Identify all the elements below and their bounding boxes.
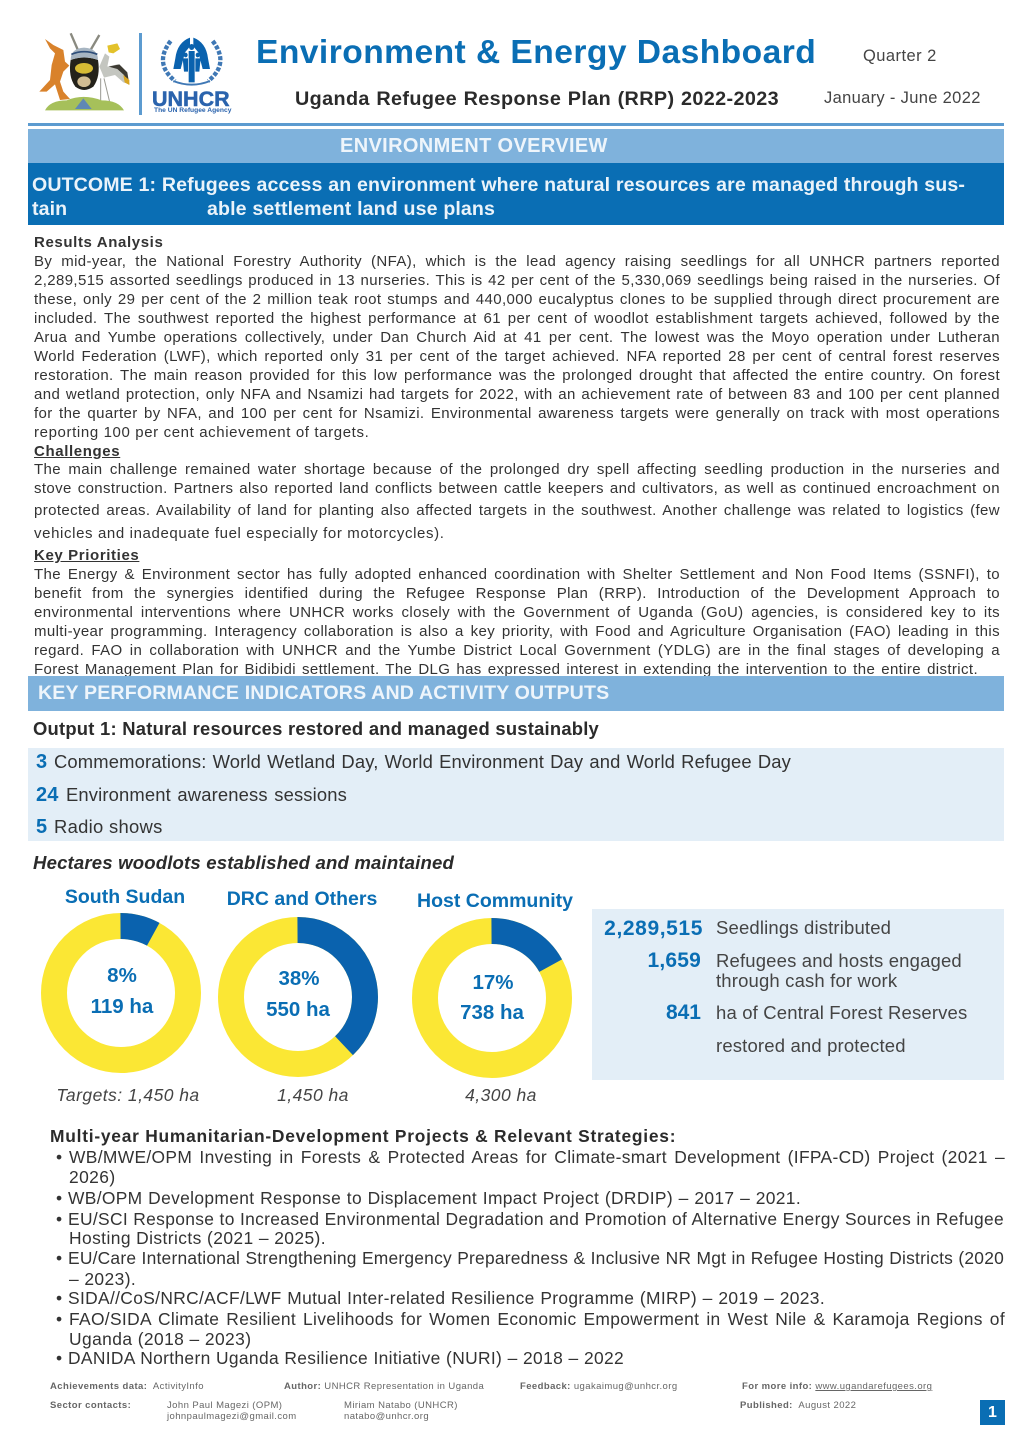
- UNHCR wordmark: UNHCR: [152, 87, 230, 111]
- priorities paragraph: The Energy & Environment sector has fully adopted enhanced coordination with Shelter Settlement and Non Food Items (SSNFI), to: [34, 566, 1000, 583]
- donut hectares: 550 ha: [266, 998, 330, 1021]
- list: multi-year projects: [50, 1126, 1005, 1368]
- page number: [980, 1400, 1005, 1425]
- footer: contact OPM: [166, 1400, 297, 1422]
- results paragraph: included. The southwest reported the highest performance at 61 per cent of woodlot establishment targets achieved, followed by the: [34, 310, 1000, 327]
- donut chart: South Sudan: [41, 886, 201, 1105]
- priorities paragraph: benefit from the synergies identified during the Refugee Response Plan (RRP). Introduction of the Development Approach to: [34, 585, 1000, 602]
- list heading: Multi-year Humanitarian-Development Projects & Relevant Strategies:: [50, 1126, 676, 1146]
- banner: outcome 1: [28, 163, 1004, 225]
- footer: contact OPM: John Paul Magezi (OPM): [167, 1400, 282, 1411]
- logo: UNHCR: [152, 38, 232, 114]
- challenges paragraph: protected areas. Availability of land for planting also affected targets in the southwest. Another challenge was related to logistics (few: [34, 502, 1000, 519]
- outcome text line 2 end: able settlement land use plans: [207, 198, 495, 220]
- footer: contact UNHCR: Miriam Natabo (UNHCR): [344, 1400, 458, 1411]
- list items: SIDA//CoS/NRC/ACF/LWF Mutual Inter-related Resilience Programme (MIRP) – 2019 – 2023.: [68, 1288, 825, 1308]
- list items: •: [56, 1209, 63, 1229]
- donut percent: 8%: [107, 964, 137, 987]
- footer: more info: For more info: www.ugandarefugees.org: [742, 1381, 932, 1392]
- results paragraph: 2,289,515 assorted seedlings produced in 13 nurseries. This is 42 per cent of the 5,330,069 seedlings being raised in the nurseries. Of: [34, 272, 1000, 289]
- count: commemorations: Commemorations: World Wetland Day, World Environment Day and World Refugee Day: [54, 751, 791, 772]
- results paragraph: World Federation (LWF), which reported only 31 per cent of the target achieved. NFA reported 28 per cent of central forest reserves: [34, 348, 1000, 365]
- count: awareness sessions: Environment awareness sessions: [66, 784, 347, 805]
- challenges paragraph: [34, 461, 1000, 542]
- panel: key figures: [592, 909, 1004, 1080]
- text block: key priorities: [34, 547, 1000, 678]
- results paragraph: for the quarter by NFA, and 100 per cent for Nsamizi. Environmental awareness targets were generally on track with most operations: [34, 405, 1000, 422]
- figure: refugees number: 1,659: [647, 949, 701, 972]
- heading: output 1: Output 1: Natural resources restored and managed sustainably: [33, 718, 599, 739]
- footer: contact UNHCR: natabo@unhcr.org: [344, 1411, 429, 1422]
- heading: challenges: Challenges: [34, 443, 120, 460]
- footer: contact UNHCR: [344, 1400, 458, 1422]
- heading: key priorities: Key Priorities: [34, 547, 139, 564]
- donut label: Host Community: [417, 890, 573, 912]
- priorities paragraph: regard. FAO in collaboration with UNHCR and the Yumbe District Local Government (YDLG) are in the final stages of developing a: [34, 642, 1000, 659]
- figure: forest label: restored and protected: [716, 1035, 906, 1056]
- challenges paragraph: vehicles and inadequate fuel especially for motorcycles).: [34, 525, 445, 542]
- banner: environment overview: [28, 129, 1004, 163]
- banner: key performance indicators: [28, 676, 1004, 711]
- priorities paragraph: Forest Management Plan for Bidibidi settlement. The DLG has expressed interest in extending the intervention to the entire district.: [34, 661, 978, 678]
- list items: Uganda (2018 – 2023): [69, 1329, 251, 1349]
- list items: •: [56, 1309, 63, 1329]
- subtitle: Uganda Refugee Response Plan (RRP) 2022-2023: [295, 88, 779, 110]
- donut ring: [412, 918, 572, 1078]
- list items: [56, 1147, 1005, 1368]
- results paragraph: restoration. The main reason provided for this low performance was the prolonged drought that affected the entire country. On forest: [34, 367, 1000, 384]
- banner text: KEY PERFORMANCE INDICATORS AND ACTIVITY OUTPUTS: [38, 682, 609, 704]
- figure: forest label: [716, 1002, 967, 1056]
- donut percent: 17%: [472, 971, 514, 994]
- heading: hectares woodlots: Hectares woodlots established and maintained: [33, 852, 454, 873]
- results paragraph: and wetland protection, only NFA and Nsamizi had targets for 2022, with an achievement rate of between 83 and 100 per cent planned: [34, 386, 1000, 403]
- figure: refugees label: Refugees and hosts engaged: [716, 950, 962, 971]
- icon: UNHCR emblem: [160, 38, 222, 86]
- donut chart: Host Community: [412, 890, 573, 1105]
- priorities paragraph: [34, 566, 1000, 678]
- logo divider: [139, 33, 142, 115]
- donut percent: 38%: [278, 967, 320, 990]
- list items: EU/Care International Strengthening Emergency Preparedness & Inclusive NR Mgt in Refugee Hosting Districts (2020: [68, 1248, 1004, 1268]
- list items: WB/OPM Development Response to Displacement Impact Project (DRDIP) – 2017 – 2021.: [68, 1188, 801, 1208]
- results paragraph: reporting 100 per cent achievement of targets.: [34, 424, 369, 441]
- footer: achievements data: Achievements data: ActivityInfo: [50, 1381, 204, 1392]
- figure: forest number: 841: [666, 1001, 701, 1024]
- results paragraph: Arua and Yumbe operations collectively, under Dan Church Aid at 41 per cent. The lowest was the Moyo operation under Lutheran: [34, 329, 1000, 346]
- donut label: South Sudan: [65, 886, 185, 908]
- heading: results analysis: Results Analysis: [34, 234, 163, 251]
- count: radio shows: 5: [36, 816, 47, 838]
- list items: •: [56, 1147, 63, 1167]
- date range: January - June 2022: [824, 89, 981, 107]
- footer: [50, 1381, 932, 1422]
- list items: •: [56, 1288, 63, 1308]
- donut target: 1,450 ha: [277, 1085, 349, 1105]
- donut ring: [218, 917, 378, 1077]
- results paragraph: By mid-year, the National Forestry Authority (NFA), which is the lead agency raising seedlings for all UNHCR partners reported: [34, 253, 1000, 270]
- banner text: ENVIRONMENT OVERVIEW: [340, 135, 608, 157]
- figure: seedlings number: 2,289,515: [604, 917, 703, 940]
- priorities paragraph: multi-year programming. Interagency collaboration is also a key priority, with Food and Agriculture Organisation (FAO) leading in this: [34, 623, 1000, 640]
- list items: FAO/SIDA Climate Resilient Livelihoods for Women Economic Empowerment in West Nile & Karamoja Regions of: [69, 1309, 1005, 1329]
- donut label: DRC and Others: [227, 888, 377, 910]
- list items: •: [56, 1348, 63, 1368]
- panel: activity counts: [28, 748, 1004, 841]
- page number: 1: [988, 1404, 997, 1421]
- outcome text line 1: OUTCOME 1: Refugees access an environment where natural resources are managed through sus-: [32, 174, 965, 196]
- list items: DANIDA Northern Uganda Resilience Initiative (NURI) – 2018 – 2022: [68, 1348, 624, 1368]
- challenges paragraph: The main challenge remained water shortage because of the prolonged dry spell affecting seedling production in the nurseries and: [34, 461, 1000, 478]
- list items: Hosting Districts (2021 – 2025).: [69, 1228, 326, 1248]
- list items: 2026): [69, 1167, 116, 1187]
- logo: Uganda coat of arms: [39, 32, 130, 110]
- count: radio shows: Radio shows: [54, 816, 163, 837]
- quarter label: Quarter 2: [863, 47, 937, 65]
- list items: •: [56, 1188, 63, 1208]
- donut target: 4,300 ha: [465, 1085, 537, 1105]
- title: Environment & Energy Dashboard: [256, 34, 816, 71]
- list items: – 2023).: [69, 1269, 136, 1289]
- list items: •: [56, 1248, 63, 1268]
- text block: results analysis: [34, 234, 1000, 441]
- figure: seedlings label: Seedlings distributed: [716, 917, 891, 938]
- list items: WB/MWE/OPM Investing in Forests & Protected Areas for Climate-smart Development (IFPA-CD) Project (2021 –: [69, 1147, 1005, 1167]
- priorities paragraph: environmental interventions where UNHCR works closely with the Government of Uganda (GoU) agencies, is considered key to its: [34, 604, 1000, 621]
- count: commemorations: 3: [36, 751, 47, 773]
- text block: challenges: [34, 443, 1000, 542]
- footer: feedback: Feedback: ugakaimug@unhcr.org: [520, 1381, 678, 1392]
- footer: sector contacts label: Sector contacts:: [50, 1400, 131, 1411]
- footer: published: Published: August 2022: [740, 1400, 856, 1411]
- footer: author: Author: UNHCR Representation in Uganda: [284, 1381, 484, 1392]
- figure: forest label: ha of Central Forest Reserves: [716, 1002, 967, 1023]
- header rule: [28, 123, 1004, 126]
- list items: EU/SCI Response to Increased Environmental Degradation and Promotion of Alternative Energy Sources in Refugee: [68, 1209, 1004, 1229]
- count: awareness sessions: 24: [36, 784, 59, 806]
- results paragraph: these, only 29 per cent of the 2 million teak root stumps and 440,000 eucalyptus clones to be supplied through direct procurement are: [34, 291, 1000, 308]
- donut target: Targets: 1,450 ha: [56, 1085, 200, 1105]
- figure: refugees label: [716, 950, 962, 991]
- footer: contact OPM: johnpaulmagezi@gmail.com: [167, 1411, 297, 1422]
- donut hectares: 738 ha: [460, 1001, 524, 1024]
- donut ring: [41, 913, 201, 1073]
- UNHCR tagline: The UN Refugee Agency: [154, 107, 231, 114]
- outcome text line 2 start: tain: [32, 198, 67, 220]
- donut hectares: 119 ha: [91, 995, 153, 1018]
- results paragraph: [34, 253, 1000, 441]
- donut chart: DRC and Others: [218, 888, 378, 1105]
- figure: refugees label: through cash for work: [716, 970, 897, 991]
- challenges paragraph: stove construction. Partners also reported land conflicts between cattle keepers and cultivators, as well as continued encroachment on: [34, 480, 1000, 497]
